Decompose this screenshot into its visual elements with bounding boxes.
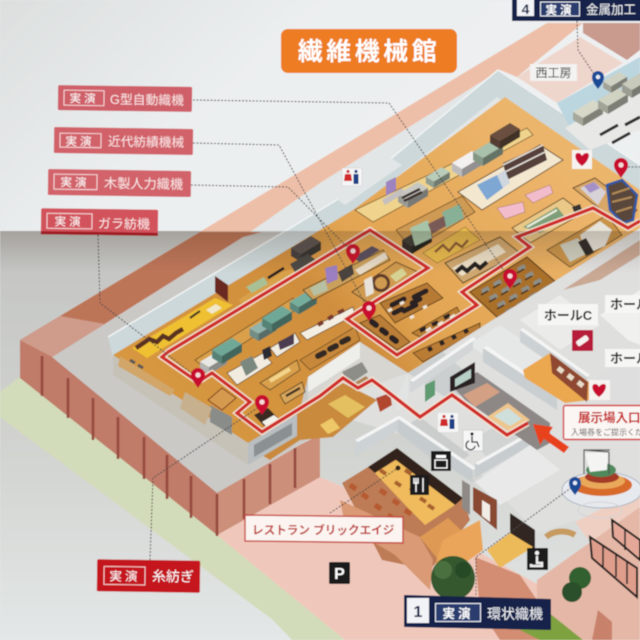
wood room south of main hall <box>245 383 392 460</box>
exhibit: coloured machines platform <box>290 246 390 300</box>
label: ガラ紡機 <box>41 208 158 236</box>
icon: restaurant <box>410 475 429 495</box>
title: 繊維機械館 <box>298 38 440 66</box>
white interior walls of the hall wing <box>355 328 590 483</box>
restaurant room <box>342 448 470 570</box>
exhibit: large teal and dark machines <box>396 196 475 254</box>
icon: restroom lower <box>438 413 458 432</box>
icon: shop <box>431 451 451 471</box>
exhibit: coil machines platform <box>352 262 418 305</box>
small exhibit by the entrance corner <box>208 388 280 428</box>
title <box>281 29 457 73</box>
exhibit: yellow platform with wooden looms <box>423 227 480 263</box>
label: 木製人力織機: 木製人力織機 <box>104 176 183 192</box>
circular loom display <box>562 450 640 518</box>
exhibit: right machines <box>547 215 622 267</box>
label: 木製人力織機 <box>48 169 191 197</box>
label: G型自動織機: G型自動織機 <box>110 92 184 108</box>
restaurant leader dot <box>396 466 400 470</box>
exhibit: wooden yellow strip with looms <box>132 276 233 358</box>
icon: parking: P <box>334 566 345 583</box>
label: 糸紡ぎ: 糸紡ぎ <box>152 568 194 585</box>
fold shadow across the sheet <box>0 231 640 273</box>
label: G型自動織機: 実演 <box>69 92 99 106</box>
label: G型自動織機 <box>58 85 192 112</box>
glass room inside hall <box>308 342 408 400</box>
front wall of main hall <box>113 355 297 465</box>
brick perimeter wall <box>20 340 320 536</box>
label: 西工房: 西工房 <box>535 66 572 80</box>
label: 糸紡ぎ: 実演 <box>109 568 141 584</box>
room: west workshop <box>517 23 640 150</box>
label: ガラ紡機: ガラ紡機 <box>98 216 150 232</box>
outer terrace: grey paving <box>52 70 640 493</box>
orange annex rooms <box>340 480 535 590</box>
label: 近代紡績機械: 実演 <box>65 135 95 149</box>
back row platform and machines <box>355 123 533 222</box>
grey carpet room <box>425 362 550 450</box>
main exhibition floor <box>113 97 640 443</box>
entrance hall floor <box>475 445 560 505</box>
label: exhibition entrance <box>564 406 640 440</box>
pink ground south of the building <box>217 477 640 640</box>
icon: bottle sign <box>572 330 593 351</box>
wall partition highlight <box>108 70 640 337</box>
label: 1 環状織機: 1 <box>414 604 423 621</box>
lower pink building <box>475 490 640 640</box>
label: 4 金属加工 <box>512 0 640 21</box>
exhibit: small black machines on wood <box>300 327 360 370</box>
green strip along the site boundary <box>0 377 345 640</box>
icon: restroom upper <box>342 168 362 186</box>
label: 4 金属加工: 金属加工 <box>586 3 636 17</box>
exhibit: dark spinning frames <box>360 283 480 362</box>
icon: parking <box>329 562 350 584</box>
label: exhibition entrance: 展示場入口 <box>578 410 640 425</box>
icon: AED upper <box>572 150 592 169</box>
icon: seated person <box>527 548 548 570</box>
label: 近代紡績機械: 近代紡績機械 <box>108 135 185 150</box>
exhibit: cream platform with dark spinning frames <box>445 237 520 283</box>
visitor route: red path <box>162 208 640 435</box>
label: ホールC <box>538 304 598 325</box>
tree right <box>562 567 591 602</box>
label: レストラン ブリックエイジ: レストラン ブリックエイジ <box>252 523 395 537</box>
grey upper wall of the building <box>108 70 640 358</box>
label: ホールC: ホールC <box>544 308 593 323</box>
label: 木製人力織機: 実演 <box>60 176 90 190</box>
label: ガラ紡機: 実演 <box>54 215 84 229</box>
label: 1 環状織機: 実演 <box>442 606 474 621</box>
exhibit: white platforms with models <box>227 307 355 404</box>
corridor and hall floors <box>310 228 640 533</box>
exhibit: green spinning machine <box>512 198 583 243</box>
label: 糸紡ぎ <box>97 559 200 593</box>
exhibit: teal machine row <box>195 291 317 374</box>
label: 近代紡績機械 <box>54 127 193 155</box>
exhibit: rows of small spinning machines <box>470 257 557 320</box>
dotted leader lines <box>98 21 640 595</box>
exhibit: pink textile stacks <box>497 185 553 219</box>
location pins <box>191 71 628 495</box>
icon: wheelchair <box>463 430 483 451</box>
salmon roof band <box>20 23 583 357</box>
label: 1 環状織機: 環状織機 <box>487 606 543 622</box>
icon: AED lower <box>589 380 610 400</box>
machines: metal working row <box>573 72 640 143</box>
label: 4 金属加工: 実演 <box>546 3 574 17</box>
orange meeting room <box>523 353 590 403</box>
exhibit: blue framed loom <box>573 178 637 227</box>
label: 1 環状織機 <box>404 595 551 630</box>
exhibit: back left tools on wood <box>238 236 321 308</box>
exhibit platform: long white base with blue and dark machines <box>458 145 563 210</box>
label: レストラン ブリックエイジ <box>245 515 403 543</box>
label: 4 金属加工: 4 <box>522 1 530 17</box>
grass <box>520 612 583 640</box>
label: 西工房 <box>530 64 577 81</box>
arrow: entrance <box>533 424 569 453</box>
tree left <box>431 556 475 620</box>
small room at back <box>320 150 402 205</box>
